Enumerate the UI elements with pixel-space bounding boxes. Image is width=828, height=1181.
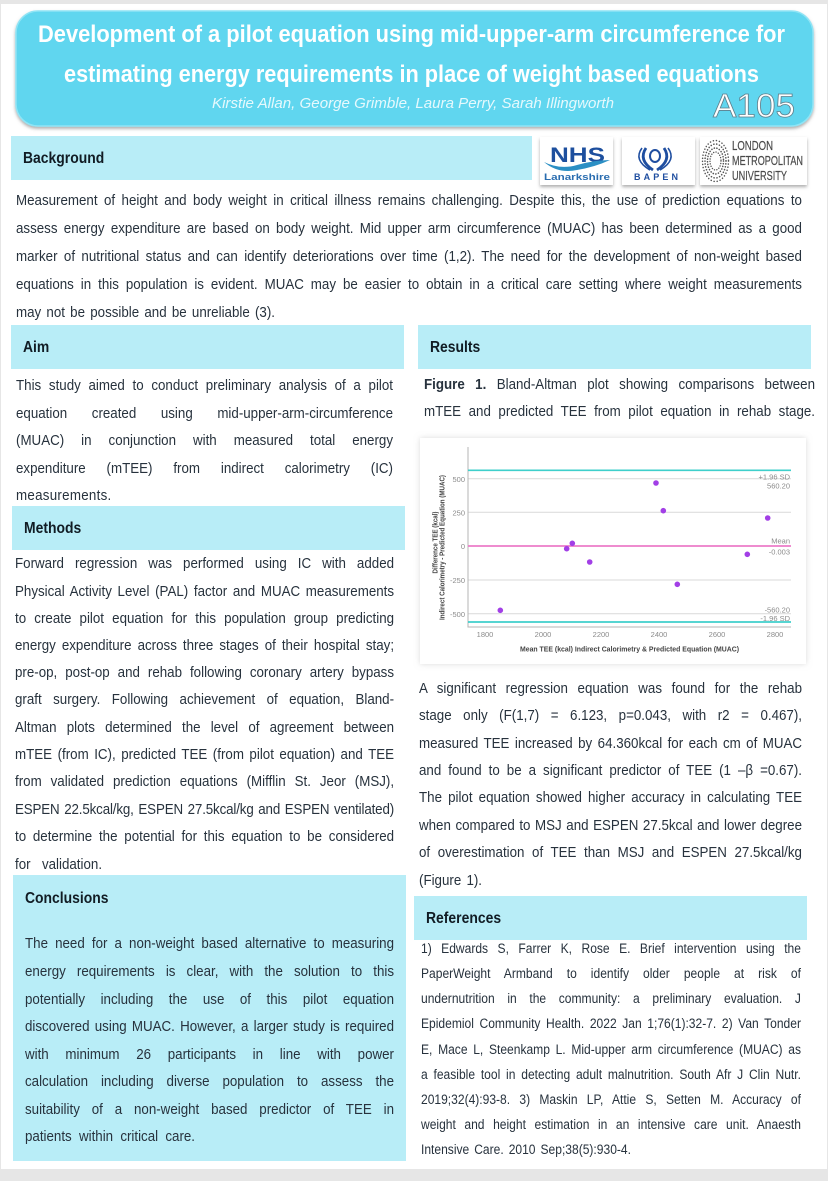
x axis ticks	[477, 630, 783, 639]
y axis ticks: 0	[461, 542, 465, 551]
y axis title: Difference TEE (kcal)	[432, 512, 440, 574]
text: aim: measurements.	[16, 488, 112, 504]
text: background: Measurement of height and body weight in critical illness remains challenging. Despite this, the use of prediction equations to	[16, 193, 802, 209]
text: results: A significant regression equation was found for the rehab	[419, 681, 802, 697]
conclusions text: suitability of a non-weight based predictor of TEE in	[25, 1102, 394, 1118]
text: background	[16, 193, 802, 321]
panel: aim heading: Aim	[23, 339, 49, 356]
reference line labels: -0.003	[769, 548, 790, 556]
x axis ticks: 2400	[651, 630, 667, 639]
reference line labels: +1.96 SD	[759, 472, 791, 482]
text: methods: to determine the potential for this equation to be considered	[15, 829, 394, 845]
panel: results heading	[418, 325, 811, 369]
conclusions text: patients within critical care.	[25, 1129, 195, 1145]
text: aim: (MUAC) in conjunction with measured total energy	[16, 433, 393, 449]
text: methods: Physical Activity Level (PAL) factor and MUAC measurements	[15, 584, 394, 600]
x axis ticks: 2000	[535, 630, 551, 639]
text: background: equations in this population is evident. MUAC may be easier to obtain in a critical care setting where weight measurements	[16, 277, 802, 293]
text: methods: graft surgery. Following achievement of equation, Bland-	[15, 692, 394, 708]
text: aim: equation created using mid-upper-arm-circumference	[16, 406, 393, 422]
text: results: of overestimation of TEE than MSJ and ESPEN 27.5kcal/kg	[419, 845, 802, 861]
panel: aim heading	[11, 325, 404, 369]
text: methods: Altman plots determined the level of agreement between	[15, 720, 394, 736]
text: methods: to create pilot equation for this population group predicting	[15, 611, 394, 627]
logo: NHS Lanarkshire: NHS	[550, 144, 605, 167]
abstract number: A105	[713, 87, 795, 124]
text: results: and found to be a significant predictor of TEE (1 –β =0.67).	[419, 763, 802, 779]
panel: results heading: Results	[430, 339, 480, 356]
conclusions text: The need for a non-weight based alternative to measuring	[25, 936, 394, 952]
panel: background heading	[11, 136, 532, 180]
conclusions text: calculation including diverse population to assess the	[25, 1074, 394, 1090]
logo: London Metropolitan University: METROPOLITAN	[732, 154, 803, 168]
figure caption: mTEE and predicted TEE from pilot equation in rehab stage.	[424, 404, 815, 420]
reference line labels: 560.20	[767, 482, 790, 490]
text: aim: This study aimed to conduct preliminary analysis of a pilot	[16, 378, 393, 394]
logo: BAPEN: BAPEN	[634, 172, 678, 182]
conclusions text: potentially including the use of this pilot equation	[25, 992, 394, 1008]
authors: Kirstie Allan, George Grimble, Laura Perry, Sarah Illingworth	[212, 95, 614, 112]
conclusions text	[25, 936, 394, 1145]
conclusions heading: Conclusions	[25, 890, 109, 907]
logo: NHS Lanarkshire	[540, 137, 613, 185]
panel: background heading: Background	[23, 150, 104, 167]
text: methods: from validated prediction equations (Mifflin St. Jeor (MSJ),	[15, 774, 394, 790]
logo: NHS Lanarkshire: Lanarkshire	[544, 172, 610, 183]
y axis ticks: -500	[450, 610, 465, 619]
reference line labels: Mean	[771, 536, 790, 546]
text: methods: Forward regression was performed using IC with added	[15, 556, 394, 572]
text: methods: mTEE (from IC), predicted TEE (from pilot equation) and TEE	[15, 747, 394, 763]
conclusions text: energy requirements is clear, with the solution to this	[25, 964, 394, 980]
text: methods: for validation.	[15, 857, 102, 873]
text: methods: pre-op, post-op and rehab following coronary artery bypass	[15, 665, 394, 681]
panel: conclusions	[13, 875, 406, 1161]
text: results: (Figure 1).	[419, 873, 482, 889]
panel: methods heading	[12, 506, 405, 550]
data points	[498, 480, 770, 613]
title: estimating energy requirements in place of weight based equations	[64, 61, 759, 88]
text: results	[419, 681, 802, 889]
x axis ticks: 1800	[477, 630, 493, 639]
figure caption	[424, 377, 815, 420]
text: references: Intensive Care. 2010 Sep;38(5):930-4.	[421, 1142, 631, 1157]
text: background: marker of nutritional status and can identify deteriorations over time (1,2). The need for the development of non-weight based	[16, 249, 802, 265]
logos	[538, 138, 809, 189]
text: references: PaperWeight Armband to identify older people at risk of	[421, 966, 801, 981]
y axis ticks	[450, 475, 465, 619]
logo: London Metropolitan University: LONDON	[732, 139, 773, 153]
logo: London Metropolitan University	[700, 137, 807, 185]
logo: London Metropolitan University: UNIVERSITY	[732, 169, 787, 183]
title banner	[13, 10, 816, 131]
text: methods: ESPEN 22.5kcal/kg, ESPEN 27.5kcal/kg and ESPEN ventilated)	[15, 802, 394, 818]
text: aim: expenditure (mTEE) from indirect calorimetry (IC)	[16, 461, 393, 477]
conclusions text: discovered using MUAC. However, a larger study is required	[25, 1019, 394, 1035]
panel: methods heading: Methods	[24, 520, 81, 537]
text: references	[421, 941, 801, 1157]
text: results: The pilot equation showed higher accuracy in calculating TEE	[419, 790, 802, 806]
x axis ticks: 2600	[709, 630, 725, 639]
x axis ticks: 2200	[593, 630, 609, 639]
x axis title: Mean TEE (kcal) Indirect Calorimetry & Predicted Equation (MUAC)	[520, 646, 739, 654]
x axis ticks: 2800	[767, 630, 783, 639]
reference line labels	[759, 472, 791, 623]
reference line labels: -1.96 SD	[760, 614, 791, 623]
text: results: measured TEE increased by 64.360kcal for each cm of MUAC	[419, 736, 802, 752]
text: results: stage only (F(1,7) = 6.123, p=0.043, with r2 = 0.467),	[419, 708, 802, 724]
text: references: 2019;32(4):93-8. 3) Maskin LP, Attie S, Setten M. Accuracy of	[421, 1092, 801, 1107]
text: methods	[15, 556, 394, 873]
text: methods: energy expenditure across three stages of their hospital stay;	[15, 638, 394, 654]
text: references: a feasible tool in detecting adult malnutrition. South Afr J Clin Nutr.	[421, 1067, 801, 1082]
figure caption: Figure 1. Bland-Altman plot showing comparisons between	[424, 377, 815, 393]
panel: references heading	[414, 896, 807, 940]
conclusions text: with minimum 26 participants in line with power	[25, 1047, 394, 1063]
chart: Bland-Altman plot	[418, 436, 808, 666]
text: references: Epidemiol Community Health. 2022 Jan 1;76(1):32-7. 2) Van Tonder	[421, 1016, 801, 1031]
y axis title: Indirect Calorimetry - Predicted Equation (MUAC)	[440, 475, 446, 620]
y axis ticks: 250	[452, 508, 465, 518]
panel: references heading: References	[426, 910, 501, 927]
text: background: may not be possible and be unreliable (3).	[16, 305, 275, 321]
text: references: weight and height estimation in an intensive care unit. Anaesth	[421, 1117, 801, 1132]
text: references: E, Mace L, Steenkamp L. Mid-upper arm circumference (MUAC) as	[421, 1042, 801, 1057]
title	[38, 21, 785, 88]
logo: BAPEN	[622, 137, 695, 185]
text: references: 1) Edwards S, Farrer K, Rose E. Brief intervention using the	[421, 941, 801, 956]
text: background: assess energy expenditure are based on body weight. Mid upper arm circumference (MUAC) has been determined as a good	[16, 221, 802, 237]
reference line labels: -560.20	[765, 606, 790, 614]
y axis ticks: -250	[450, 576, 465, 585]
text: references: undernutrition in the community: a preliminary evaluation. J	[421, 991, 801, 1006]
text: results: when compared to MSJ and ESPEN 27.5kcal and lower degree	[419, 818, 802, 834]
y axis title	[432, 475, 446, 620]
y axis ticks: 500	[452, 475, 465, 484]
text: aim	[16, 378, 393, 504]
